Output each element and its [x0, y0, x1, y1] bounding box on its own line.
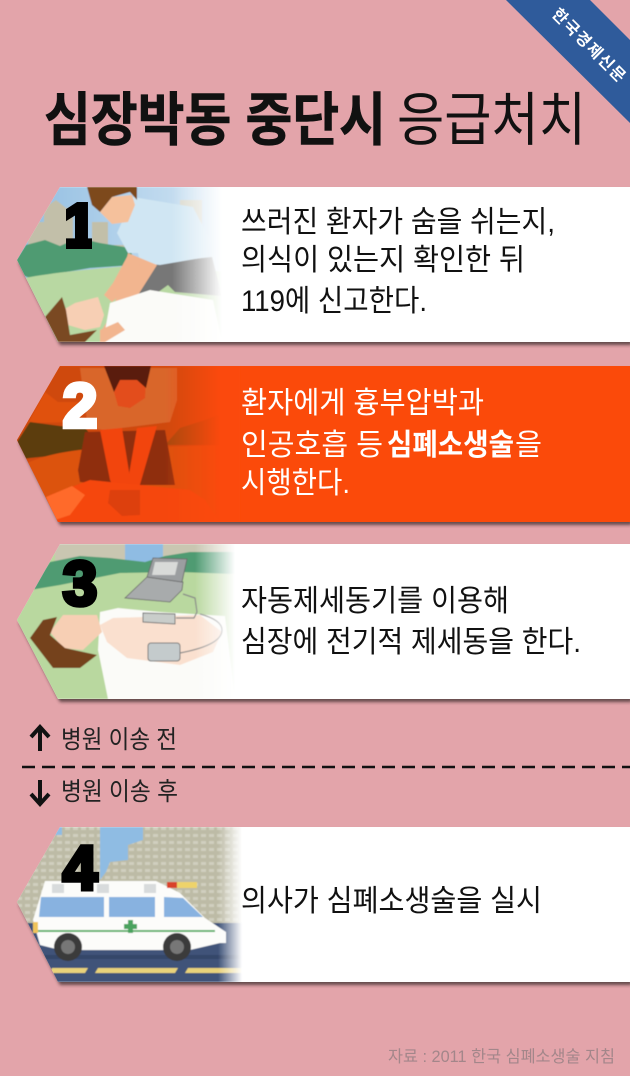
title: 심장박동 중단시: [44, 88, 386, 153]
text: step 1: 119에 신고한다.: [241, 285, 427, 318]
text: step 1: [241, 206, 555, 318]
title: 응급처치: [397, 88, 586, 153]
panel: step 4: [15, 827, 630, 985]
ribbon: publisher: [506, 0, 630, 123]
illustration: checking patient: [15, 187, 232, 342]
text: step 3: 자동제세동기를 이용해: [241, 585, 509, 618]
illustration: defibrillator: [15, 544, 245, 699]
text: step 2: [241, 387, 542, 500]
label: after transfer: 병원 이송 후: [61, 778, 178, 806]
ribbon: publisher: 한국경제신문: [548, 5, 629, 86]
text: step 2: 을: [515, 429, 542, 462]
illustration: chest compression: [17, 366, 214, 522]
paddle top: [143, 613, 175, 624]
number 1: 1: [63, 192, 97, 261]
number 3: 3: [63, 550, 97, 619]
panel: step 3: [15, 544, 630, 702]
text: step 2: 시행한다.: [241, 467, 350, 500]
text: step 3: [241, 585, 581, 659]
text: step 3: 심장에 전기적 제세동을 한다.: [241, 626, 581, 659]
device: [125, 577, 183, 602]
paddle bottom: [148, 643, 180, 661]
panel: step 2: [15, 366, 630, 525]
text: step 2: 인공호흡 등: [241, 429, 383, 462]
text: step 4: 의사가 심폐소생술을 실시: [241, 885, 542, 918]
source note: 자료 : 2011 한국 심폐소생술 지침: [388, 1047, 615, 1066]
text: step 2: 환자에게 흉부압박과: [241, 387, 484, 420]
text: step 2: 심폐소생술: [387, 429, 514, 462]
number 4: 4: [63, 834, 98, 903]
number 2: 2: [63, 372, 97, 441]
illustration: ambulance: [15, 827, 248, 982]
panel: step 1: [15, 187, 630, 345]
text: step 1: 쓰러진 환자가 숨을 쉬는지,: [241, 206, 555, 239]
text: step 1: 의식이 있는지 확인한 뒤: [241, 244, 525, 277]
label: before transfer: 병원 이송 전: [61, 726, 177, 754]
